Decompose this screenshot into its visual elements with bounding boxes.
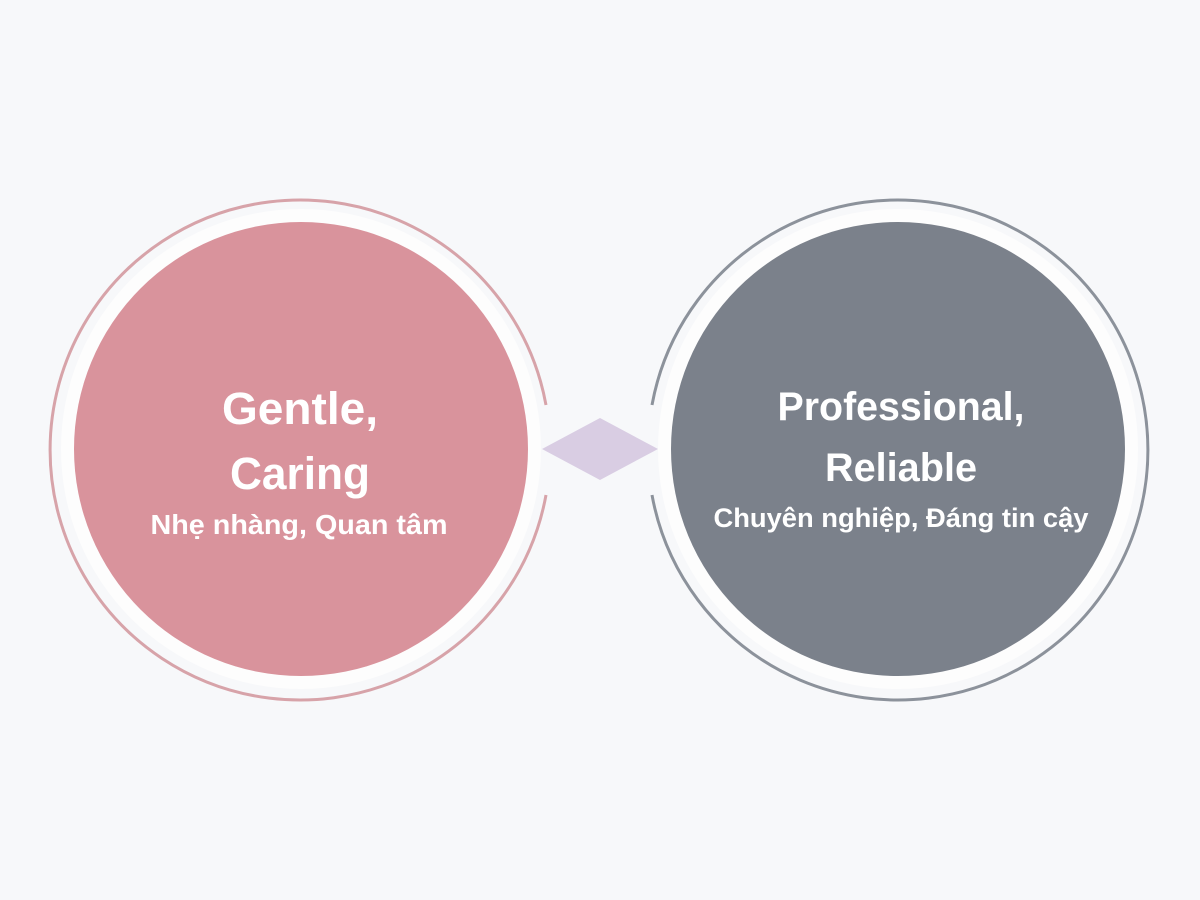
subtitle: vietnamese: Nhẹ nhàng, Quan tâm <box>150 509 448 540</box>
heading: Professional, Reliable: Reliable <box>825 446 977 490</box>
ring: left outer <box>50 200 546 700</box>
halo: left <box>61 209 541 689</box>
panel: professional reliable <box>652 200 1148 700</box>
heading: Gentle, Caring: Gentle, <box>222 383 378 434</box>
icon: diamond connector <box>542 418 658 480</box>
halo: right <box>658 209 1138 689</box>
ring: right outer <box>652 200 1148 700</box>
heading: Gentle, Caring <box>222 383 378 499</box>
circle: left fill <box>74 222 528 676</box>
heading: Gentle, Caring: Caring <box>230 448 370 499</box>
heading: Professional, Reliable: Professional, <box>778 385 1024 429</box>
circle: right fill <box>671 222 1125 676</box>
heading: Professional, Reliable <box>778 385 1024 490</box>
panel: gentle caring <box>50 200 546 700</box>
subtitle: vietnamese: Chuyên nghiệp, Đáng tin cậy <box>714 503 1088 533</box>
